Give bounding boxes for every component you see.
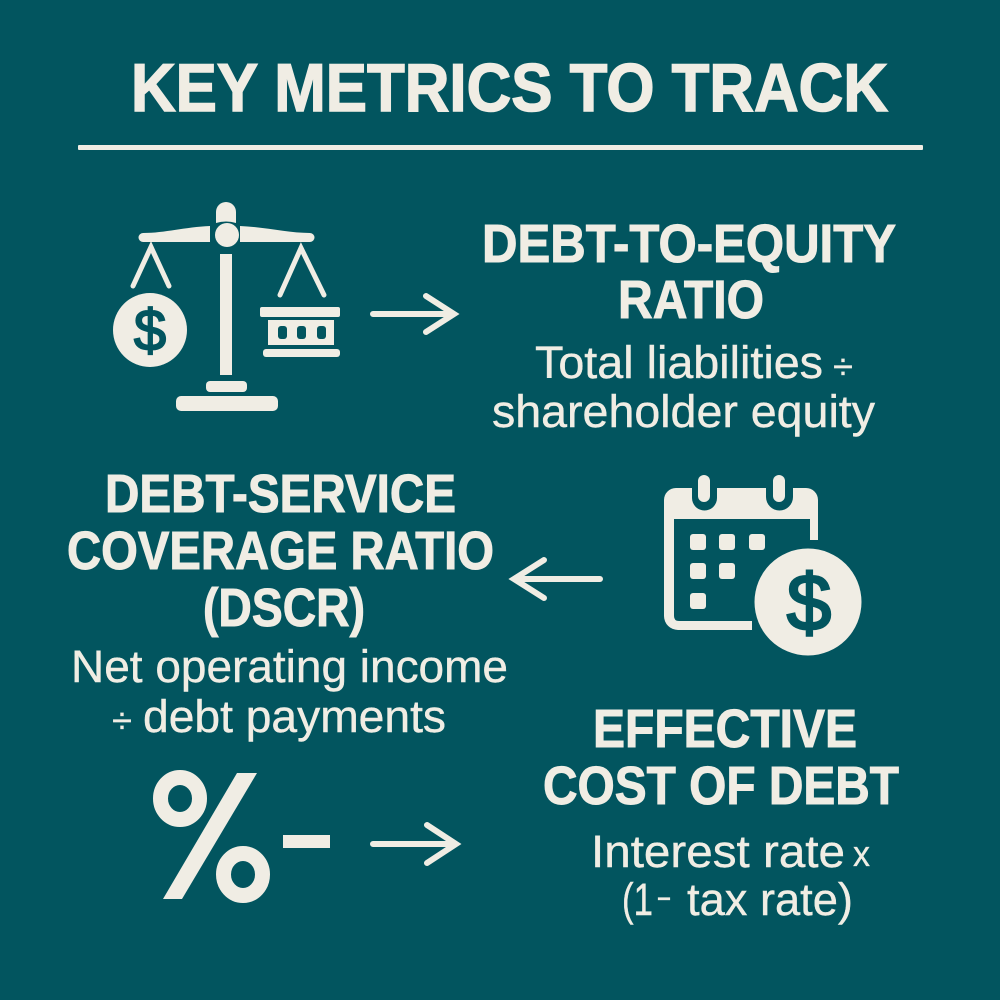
text block: effective cost of debt: COST OF DEBT xyxy=(543,756,899,816)
text block: debt-to-equity ratio: DEBT-TO-EQUITY xyxy=(482,214,896,274)
text block: debt-service coverage ratio: debt payments xyxy=(143,691,446,742)
text block: effective cost of debt: x xyxy=(853,833,870,874)
text block: debt-to-equity ratio xyxy=(482,214,896,437)
text block: effective cost of debt: EFFECTIVE xyxy=(593,699,857,759)
text block: effective cost of debt: – xyxy=(658,875,670,916)
icon: balance scale xyxy=(113,202,340,411)
text block: debt-service coverage ratio: DEBT-SERVICE xyxy=(105,464,456,524)
arrow: scale to debt-to-equity xyxy=(373,296,454,332)
text block: effective cost of debt: Interest rate xyxy=(591,826,845,877)
text block: debt-service coverage ratio xyxy=(67,464,508,742)
text block: effective cost of debt: tax rate) xyxy=(687,874,853,925)
text block: debt-service coverage ratio: ÷ xyxy=(112,700,132,741)
icon: dollar coin xyxy=(113,293,187,367)
text block: debt-to-equity ratio: shareholder equity xyxy=(492,386,876,437)
text block: debt-service coverage ratio: Net operating income xyxy=(71,641,508,692)
icon: dollar coin: $ xyxy=(134,298,166,363)
text block: effective cost of debt xyxy=(543,699,899,925)
icon: bank building xyxy=(260,307,340,357)
text block: debt-service coverage ratio: (DSCR) xyxy=(203,578,365,638)
icon: percent minus xyxy=(160,773,330,899)
arrow: calendar to dscr xyxy=(514,560,600,598)
text block: debt-to-equity ratio: RATIO xyxy=(618,270,764,330)
text block: debt-service coverage ratio: COVERAGE RATIO xyxy=(67,521,494,581)
icon: calendar with dollar coin: $ xyxy=(787,558,831,647)
text block: effective cost of debt: (1 xyxy=(622,874,653,925)
text block: debt-to-equity ratio: ÷ xyxy=(833,346,853,387)
text block: debt-to-equity ratio: Total liabilities xyxy=(535,337,823,388)
icon: calendar with dollar coin xyxy=(664,475,862,656)
title: KEY METRICS TO TRACK xyxy=(131,50,888,126)
arrow: percent to effective cost xyxy=(373,825,456,863)
